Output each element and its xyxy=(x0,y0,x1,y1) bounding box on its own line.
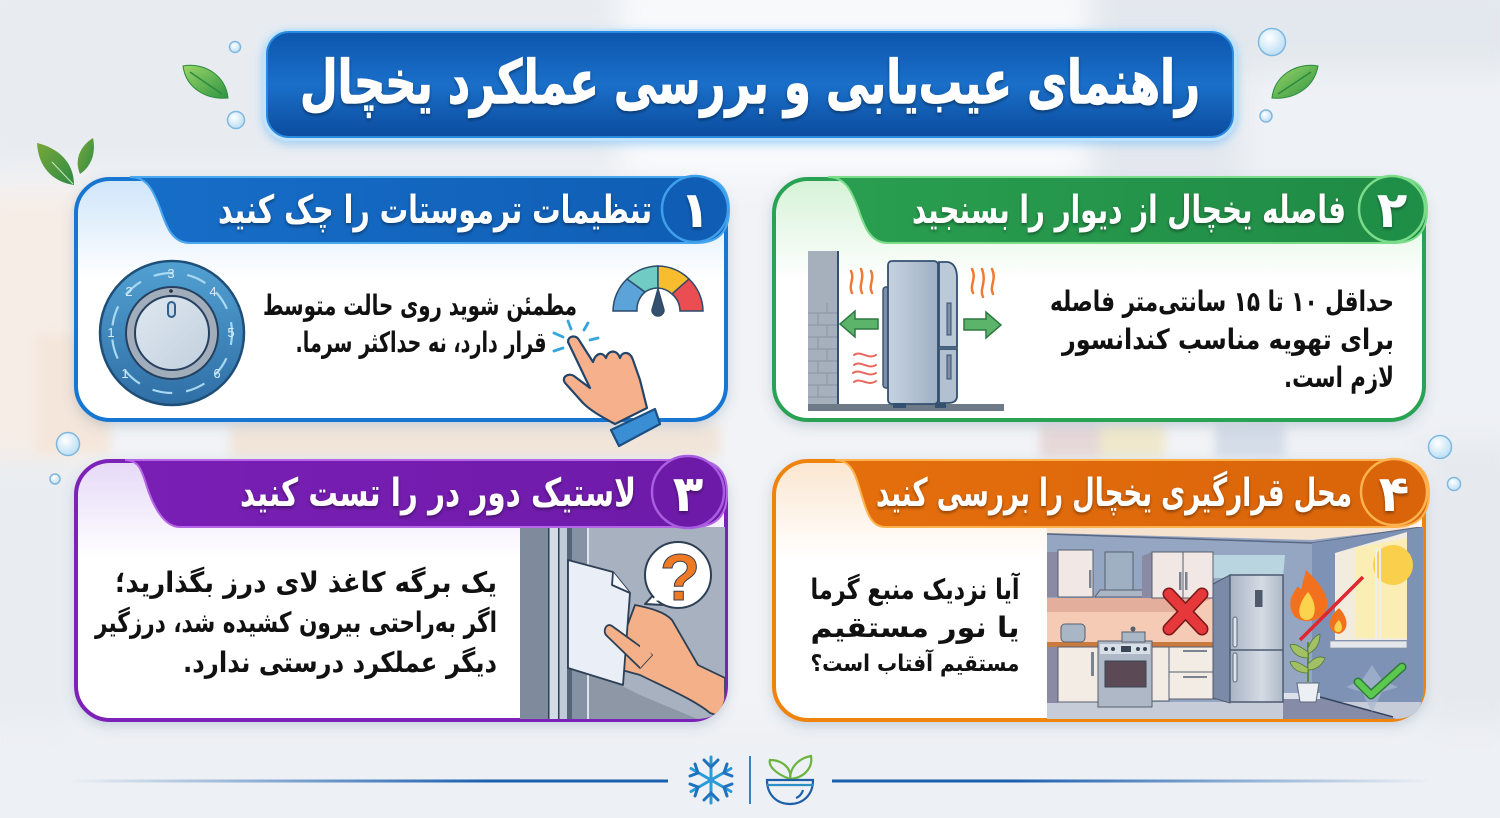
body text 4: یا نور مستقیم xyxy=(810,611,1020,644)
illustration: fridge beside wall xyxy=(808,251,1004,411)
footer line left xyxy=(70,780,668,782)
body text 1: مطمئن شوید روی حالت متوسط xyxy=(263,289,577,322)
illustration: paper in fridge door: ? xyxy=(660,540,700,614)
body text 4: آیا نزدیک منبع گرما xyxy=(810,572,1021,606)
badge 2 xyxy=(1359,176,1425,242)
badge 3 xyxy=(652,456,724,528)
leaf top right xyxy=(1272,65,1318,98)
illustration: paper in fridge door xyxy=(520,520,725,720)
icon: gauge xyxy=(613,266,703,316)
icon: bowl with leaves xyxy=(767,756,813,804)
icon: thermostat dial: 6 xyxy=(213,366,221,381)
body text 2: لازم است. xyxy=(1284,361,1394,394)
badge 1: ۱ xyxy=(680,181,710,239)
icon: thermostat dial xyxy=(100,261,244,405)
large leaves left xyxy=(37,138,94,185)
body text 1: قرار دارد، نه حداکثر سرما. xyxy=(296,326,546,359)
header 3 xyxy=(125,460,727,527)
heading 1: تنظیمات ترموستات را چک کنید xyxy=(218,188,652,233)
panel 2: wall distance xyxy=(774,176,1427,420)
icon: thermostat dial: 3 xyxy=(167,266,175,281)
icon: thermostat dial: 2 xyxy=(125,284,133,299)
body text 4: مستقیم آفتاب است؟ xyxy=(810,648,1020,677)
badge 1 xyxy=(662,176,728,242)
body text 1 xyxy=(263,289,577,359)
water bubbles xyxy=(50,28,1460,490)
body text 3: یک برگه کاغذ لای درز بگذارید؛ xyxy=(115,566,497,599)
icon: thermostat dial: 5 xyxy=(227,325,235,340)
badge 3: ۳ xyxy=(673,465,703,523)
title banner xyxy=(263,29,1237,141)
body text 2: حداقل ۱۰ تا ۱۵ سانتی‌متر فاصله xyxy=(1050,285,1394,318)
panel 1: thermostat xyxy=(76,176,729,446)
panel 4: placement xyxy=(774,459,1429,720)
body text 3 xyxy=(93,566,497,679)
icon: pointing hand xyxy=(554,321,660,446)
body text 2 xyxy=(1050,285,1394,394)
body text 3: اگر به‌راحتی بیرون کشیده شد، درزگیر xyxy=(93,606,497,639)
leaf top left xyxy=(183,65,228,98)
badge 4: ۴ xyxy=(1379,465,1409,523)
footer line right xyxy=(832,780,1430,782)
heading 3: لاستیک دور در را تست کنید xyxy=(240,471,636,516)
icon: snowflake xyxy=(690,757,732,803)
header 1 xyxy=(130,177,729,243)
panel 3: door gasket xyxy=(76,456,727,720)
badge 4 xyxy=(1361,459,1427,525)
header 4 xyxy=(835,460,1429,527)
body text 4 xyxy=(810,572,1021,677)
icon: thermostat dial: 1 xyxy=(107,325,115,340)
icon: thermostat dial: 1 xyxy=(121,366,129,381)
icon: thermostat dial: 4 xyxy=(209,284,217,299)
body text 3: دیگر عملکرد درستی ندارد. xyxy=(183,646,497,679)
illustration: kitchen scene xyxy=(1047,520,1427,720)
badge 2: ۲ xyxy=(1377,181,1407,239)
header 2 xyxy=(828,177,1427,243)
body text 2: برای تهویه مناسب کندانسور xyxy=(1060,323,1394,356)
footer divider xyxy=(749,756,751,804)
